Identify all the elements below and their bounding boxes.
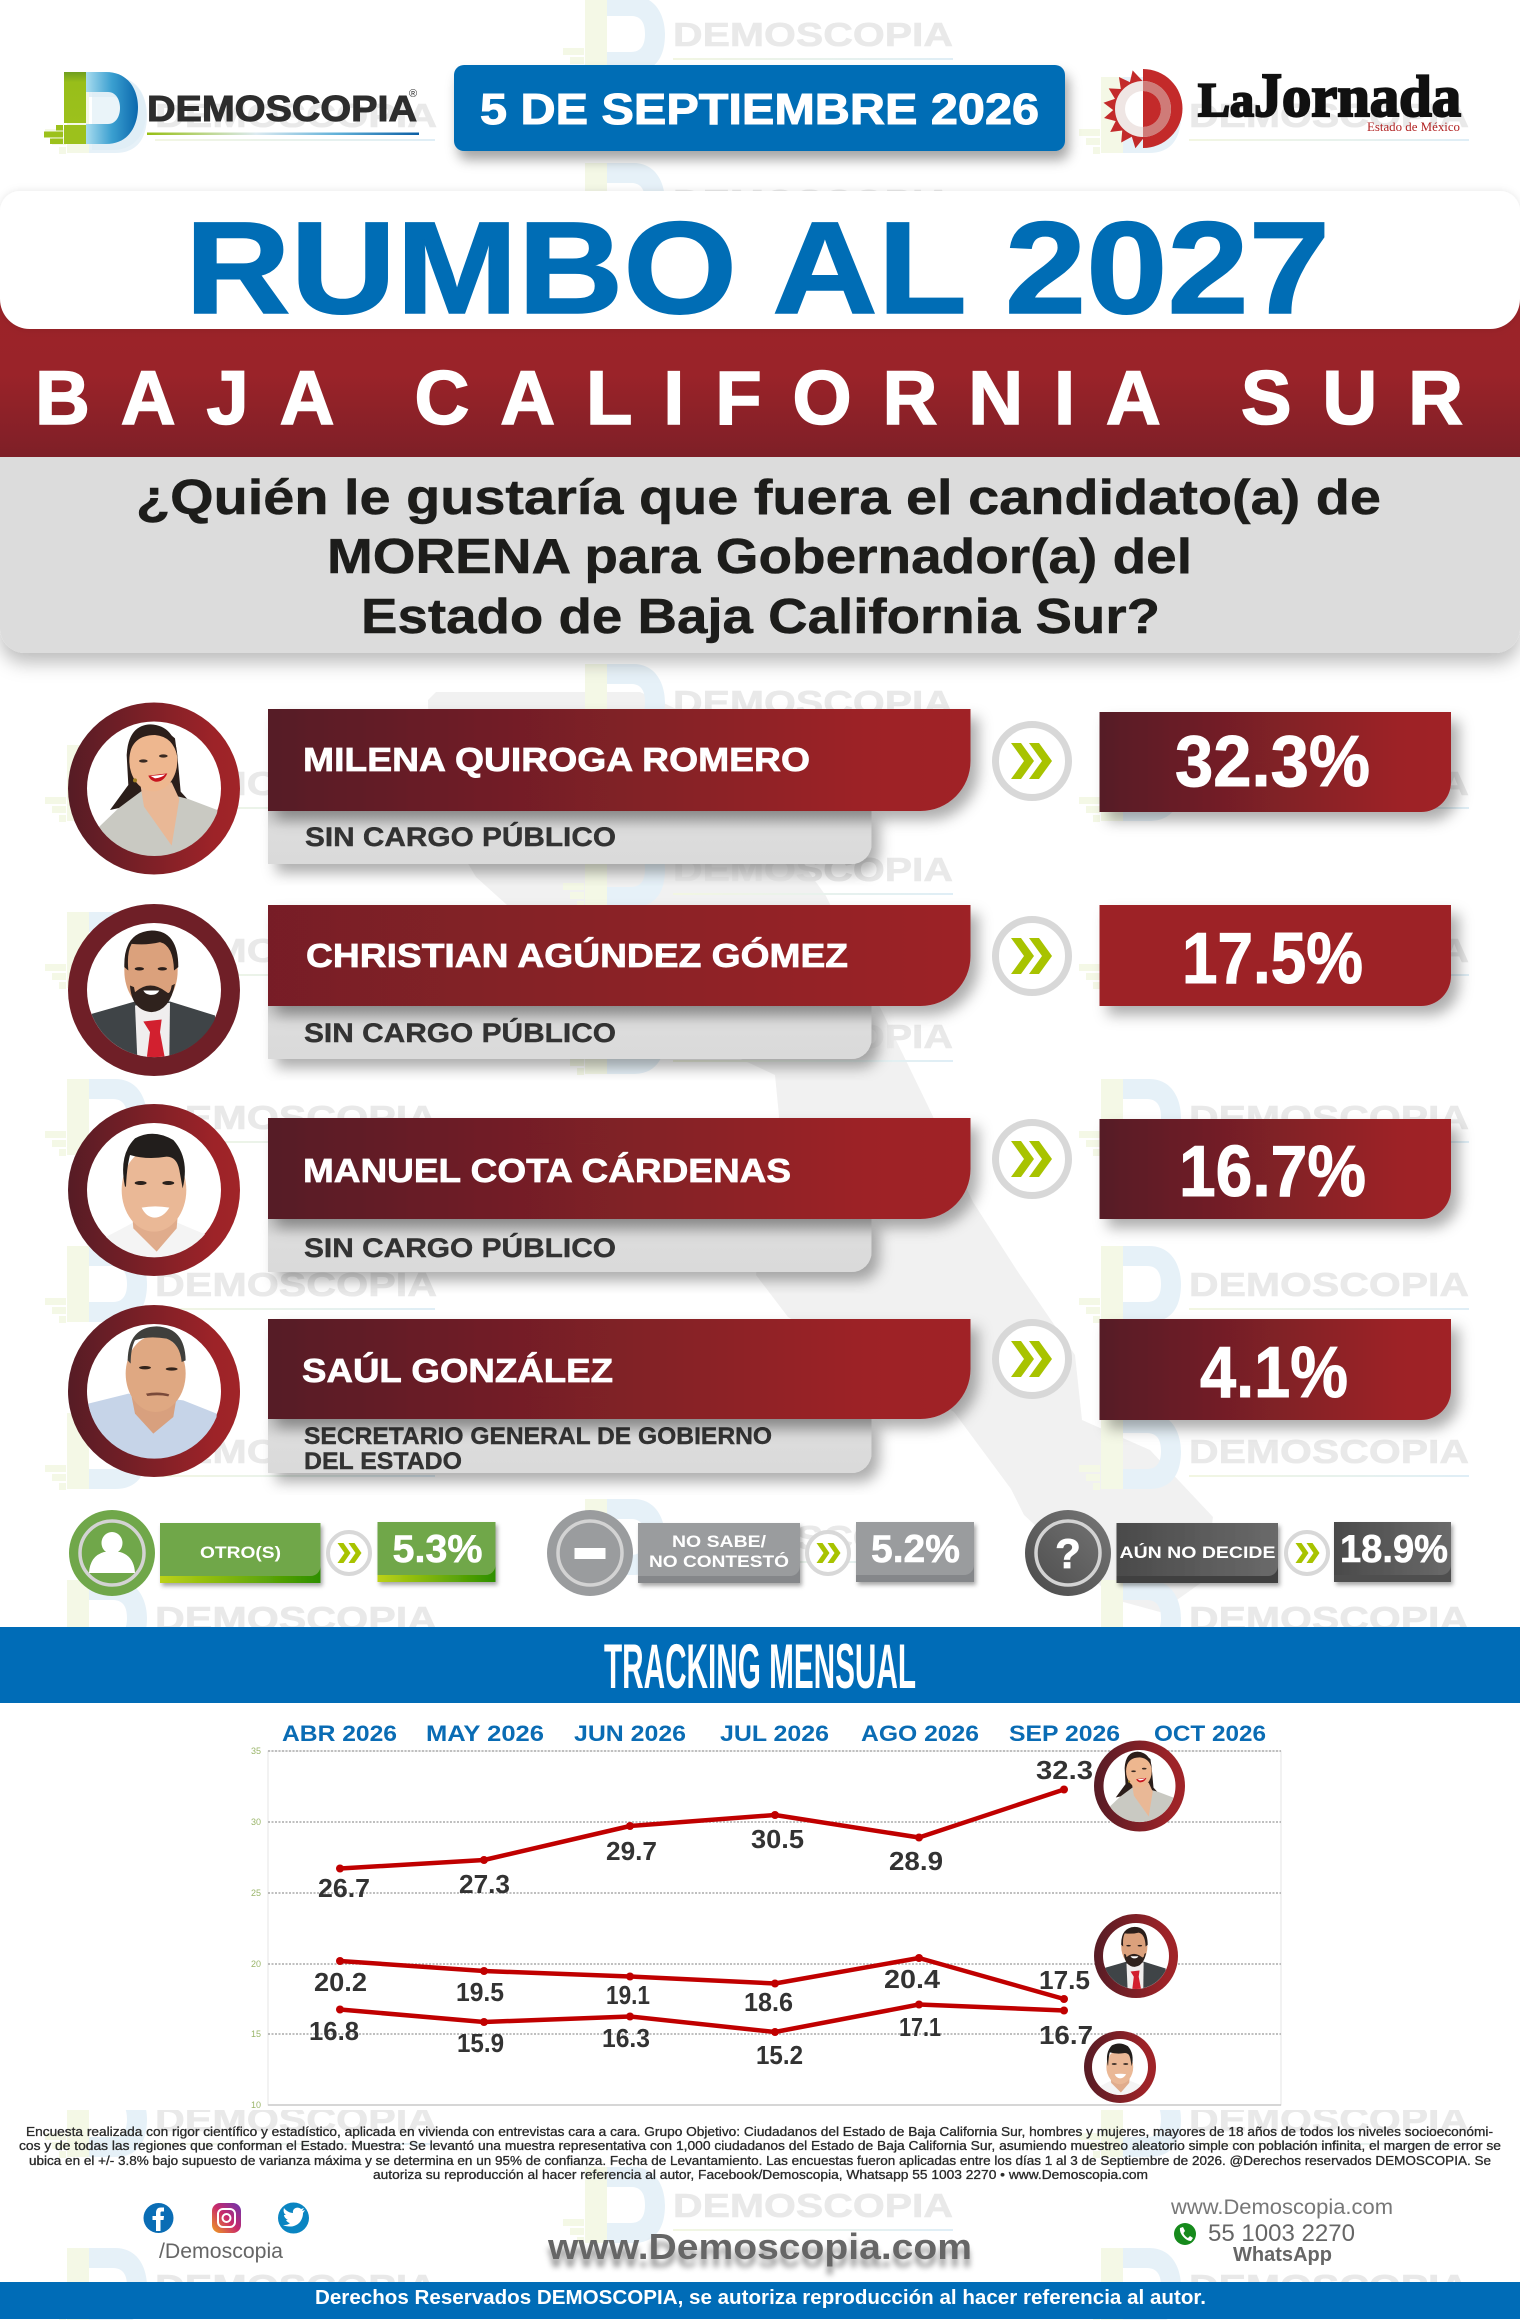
avatar: Christian (1094, 1914, 1178, 1998)
role bar: SIN CARGO PÚBLICO (304, 1232, 616, 1263)
series: Manuel (336, 2000, 1068, 2036)
state band (0, 252, 1520, 457)
series: Milena (336, 1786, 1068, 1872)
value: 5.3% (392, 1528, 482, 1571)
role bar (268, 1419, 872, 1475)
wordmark: La (1198, 74, 1254, 127)
percentage: 32.3% (1175, 722, 1370, 802)
question panel: Estado de Baja California Sur? (361, 590, 1160, 644)
watermarks: DEMOSCOPIA (1189, 1266, 1469, 1303)
logo: La Jornada: ornada (1282, 64, 1461, 129)
axis and grid: 35 (251, 1746, 261, 1756)
data labels: 26.7 (318, 1873, 370, 1903)
role bar: SIN CARGO PÚBLICO (305, 821, 616, 852)
question panel: MORENA para Gobernador(a) del (327, 530, 1192, 584)
logo: La Jornada: Estado de México (1367, 119, 1460, 134)
watermarks: DEMOSCOPIA (1189, 97, 1469, 134)
arrow (1286, 1532, 1328, 1574)
watermarks: DEMOSCOPIA (673, 1519, 953, 1556)
label (160, 1523, 320, 1583)
contact block: 55 1003 2270 (1208, 2220, 1355, 2247)
watermarks: DEMOSCOPIA (1189, 765, 1469, 802)
value (378, 1522, 496, 1582)
watermarks: DEMOSCOPIA (155, 765, 437, 802)
watermarks: DEMOSCOPIA (673, 2187, 953, 2224)
watermarks: DEMOSCOPIA (155, 1600, 437, 1637)
candidate row: Christian (68, 904, 1451, 1076)
summary: Aún no decide (1025, 1510, 1451, 1596)
icon: facebook (144, 2203, 174, 2233)
watermarks: DEMOSCOPIA (155, 932, 437, 969)
icon: twitter (278, 2202, 309, 2234)
avatar: Manuel (1084, 2031, 1156, 2103)
series: Christian (336, 1954, 1068, 2003)
watermarks: DEMOSCOPIA (1189, 2101, 1469, 2138)
contact block: WhatsApp (1233, 2244, 1332, 2266)
avatar (68, 702, 240, 874)
percentage: 4.1% (1200, 1333, 1348, 1413)
data labels: 19.1 (606, 1980, 650, 2010)
percentage (1100, 1319, 1451, 1420)
icon: whatsapp (1174, 2223, 1196, 2245)
watermarks: DEMOSCOPIA (1189, 1600, 1469, 1637)
date badge (454, 65, 1065, 151)
arrow (996, 1322, 1068, 1396)
name bar (268, 905, 970, 1006)
candidate row: Milena (68, 702, 1451, 874)
month labels: SEP 2026 (1009, 1721, 1120, 1746)
value: 5.2% (871, 1528, 960, 1571)
data labels: 20.4 (884, 1964, 941, 1994)
icon: question (1025, 1510, 1111, 1596)
avatar (68, 1305, 240, 1477)
data labels: 18.6 (744, 1987, 793, 2017)
name bar (268, 709, 970, 811)
month labels: OCT 2026 (1154, 1721, 1266, 1746)
value: 18.9% (1340, 1528, 1448, 1571)
logo: Demoscopia (44, 72, 419, 150)
title panel: RUMBO AL 2027 (185, 194, 1330, 341)
axis and grid (251, 1746, 1281, 2110)
candidate row: Saúl (68, 1305, 1451, 1477)
name bar: MILENA QUIROGA ROMERO (303, 741, 810, 778)
percentage: 17.5% (1182, 919, 1363, 999)
candidate row: Manuel (68, 1104, 1451, 1276)
name bar (268, 1118, 970, 1219)
data labels: 16.8 (309, 2016, 359, 2046)
axis and grid: 10 (251, 2100, 261, 2110)
copyright band (0, 2282, 1520, 2319)
contact block (1170, 2196, 1393, 2266)
value (1334, 1522, 1451, 1582)
name bar: CHRISTIAN AGÚNDEZ GÓMEZ (306, 937, 848, 974)
role bar: SECRETARIO GENERAL DE GOBIERNO (304, 1423, 772, 1450)
date badge: 5 DE SEPTIEMBRE 2026 (480, 85, 1039, 134)
role bar: SIN CARGO PÚBLICO (304, 1017, 616, 1048)
data labels: 17.5 (1039, 1965, 1090, 1995)
role bar: DEL ESTADO (304, 1448, 462, 1475)
watermarks: DEMOSCOPIA (155, 97, 437, 134)
name bar: SAÚL GONZÁLEZ (302, 1352, 613, 1389)
watermarks: DEMOSCOPIA (155, 1099, 437, 1136)
name bar: MANUEL COTA CÁRDENAS (303, 1152, 791, 1189)
contact block: www.Demoscopia.com (1170, 2196, 1393, 2219)
summary: No sabe (547, 1510, 974, 1596)
month labels: MAY 2026 (426, 1721, 544, 1746)
social block (144, 2202, 309, 2263)
data labels: 30.5 (751, 1824, 804, 1854)
data labels: 17.1 (899, 2012, 941, 2042)
value (856, 1522, 974, 1582)
watermarks: DEMOSCOPIA (155, 1266, 437, 1303)
axis and grid: 20 (251, 1959, 261, 1969)
avatar: Milena (1094, 1740, 1185, 1832)
avatar (68, 904, 240, 1076)
month labels: JUN 2026 (574, 1721, 686, 1746)
watermarks: DEMOSCOPIA (673, 684, 953, 721)
watermarks: DEMOSCOPIA (155, 1433, 437, 1470)
arrow (807, 1532, 849, 1574)
label (1116, 1523, 1278, 1583)
label: AÚN NO DECIDE (1120, 1543, 1276, 1562)
icon: instagram (212, 2203, 241, 2233)
label (638, 1523, 800, 1583)
wordmark: DEMOSCOPIA (147, 88, 417, 129)
role bar (268, 1219, 872, 1272)
logo: Demoscopia: ® (409, 88, 417, 100)
data labels: 27.3 (459, 1869, 510, 1899)
data labels: 20.2 (314, 1967, 367, 1997)
month labels: JUL 2026 (720, 1721, 829, 1746)
watermarks: DEMOSCOPIA (673, 16, 953, 53)
axis and grid: 30 (251, 1817, 261, 1827)
name bar (268, 1319, 970, 1419)
question panel: ¿Quién le gustaría que fuera el candidato(a) de (136, 471, 1381, 525)
icon: minus (547, 1510, 633, 1596)
avatar (68, 1104, 240, 1276)
watermarks: DEMOSCOPIA (1189, 932, 1469, 969)
data labels: 32.3 (1036, 1755, 1093, 1785)
label: OTRO(S) (200, 1543, 281, 1562)
tracking chart (251, 1721, 1281, 2110)
month labels: ABR 2026 (282, 1721, 397, 1746)
watermarks: DEMOSCOPIA (673, 851, 953, 888)
methodology note: autoriza su reproducción al hacer referencia al autor, Facebook/Demoscopia, Whatsapp 55 1003 2270 • www.Demoscopia.com (373, 2168, 1148, 2182)
data labels (309, 1755, 1093, 2070)
background map silhouette of Baja California Sur (428, 692, 1213, 1612)
month labels (282, 1721, 1266, 1746)
watermarks: DEMOSCOPIA (1189, 1099, 1469, 1136)
label: NO SABE/ (672, 1532, 766, 1551)
data labels: 15.2 (756, 2040, 803, 2070)
logo: La Jornada (1102, 62, 1461, 150)
logo: La Jornada: J (1254, 62, 1282, 130)
data labels: 15.9 (457, 2028, 504, 2058)
data labels: 19.5 (456, 1977, 504, 2007)
arrow (996, 1122, 1068, 1196)
watermarks: DEMOSCOPIA (1189, 2268, 1469, 2305)
watermarks: DEMOSCOPIA (155, 2101, 437, 2138)
state band: BAJA CALIFORNIA SUR (35, 356, 1463, 441)
arrow (996, 920, 1068, 992)
methodology note (19, 2125, 1501, 2182)
tracking heading band: TRACKING MENSUAL (604, 1632, 916, 1702)
title panel (0, 191, 1520, 341)
summary: Otros (69, 1510, 496, 1596)
methodology note: Encuesta realizada con rigor científico y estadístico, aplicada en vivienda con entrevistas cara a cara. Grupo Objetivo: Ciudadanos del Estado de Baja California Sur, hombres y mujeres, mayores de 18 años de todos los niveles socioeconómi- (26, 2125, 1493, 2139)
icon: person (69, 1510, 155, 1596)
data labels: 16.7 (1039, 2020, 1093, 2050)
label: NO CONTESTÓ (649, 1552, 789, 1571)
chart background (0, 1703, 1520, 2110)
axis and grid: 25 (251, 1888, 261, 1898)
methodology note: ubica en el +/- 3.8% bajo supuesto de varianza máxima y se determina en un 95% de confianza. Fecha de Levantamiento. Las encuestas fueron aplicadas entre los días 1 al 3 de Septiembre de 2026. @Derechos reservados DEMOSCOPIA. Se (29, 2154, 1491, 2168)
watermarks: DEMOSCOPIA (673, 183, 953, 220)
arrow (328, 1532, 370, 1574)
handle: /Demoscopia (159, 2240, 283, 2263)
watermarks: DEMOSCOPIA (1189, 1433, 1469, 1470)
watermarks: DEMOSCOPIA (673, 1018, 953, 1055)
tracking heading band (0, 1627, 1520, 1703)
percentage: 16.7% (1179, 1132, 1366, 1212)
methodology note: cos y de todas las regiones que conforman el Estado. Muestra: Se levantó una muestra representativa con 1,000 ciudadanos del Estado de Baja California Sur, asumiendo muestreo aleatorio simple con población infinita, el margen de error se (19, 2139, 1501, 2153)
role bar (268, 811, 872, 864)
data labels: 29.7 (606, 1836, 657, 1866)
arrow (996, 724, 1068, 798)
question panel (0, 457, 1520, 653)
icon: question: ? (1055, 1530, 1081, 1577)
website: www.Demoscopia.com (547, 2226, 972, 2267)
percentage (1100, 905, 1451, 1006)
copyright band: Derechos Reservados DEMOSCOPIA, se autoriza reproducción al hacer referencia al autor. (315, 2287, 1206, 2309)
watermarks: DEMOSCOPIA (155, 2268, 437, 2305)
data labels: 28.9 (889, 1846, 943, 1876)
percentage (1100, 712, 1451, 812)
role bar (268, 1006, 872, 1059)
month labels: AGO 2026 (861, 1721, 979, 1746)
axis and grid: 15 (251, 2029, 261, 2039)
data labels: 16.3 (602, 2023, 650, 2053)
percentage (1100, 1119, 1451, 1219)
